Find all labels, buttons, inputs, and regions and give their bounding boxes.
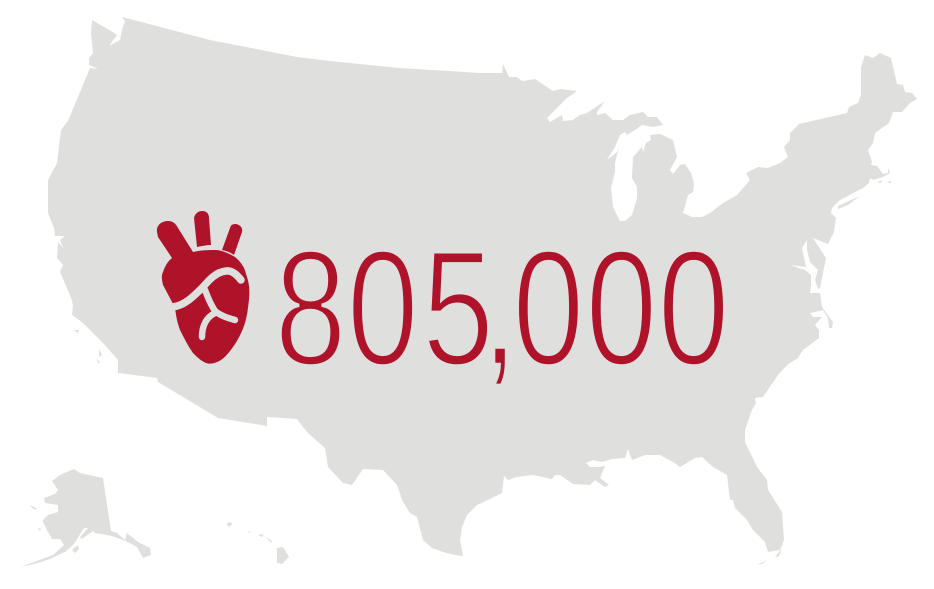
number: 805,000: 805,000: [275, 218, 729, 400]
icon: anatomical heart: [157, 211, 249, 364]
map: Alaska islands: [30, 505, 79, 553]
map: Long Island: [838, 196, 860, 209]
map: Cape islands: [757, 180, 891, 565]
map: Hawaii: [227, 522, 289, 564]
icon: artery branch: [202, 290, 235, 337]
map: Channel islands: [74, 330, 102, 363]
map: Alaska: [20, 469, 151, 567]
icon: artery: [172, 271, 241, 307]
